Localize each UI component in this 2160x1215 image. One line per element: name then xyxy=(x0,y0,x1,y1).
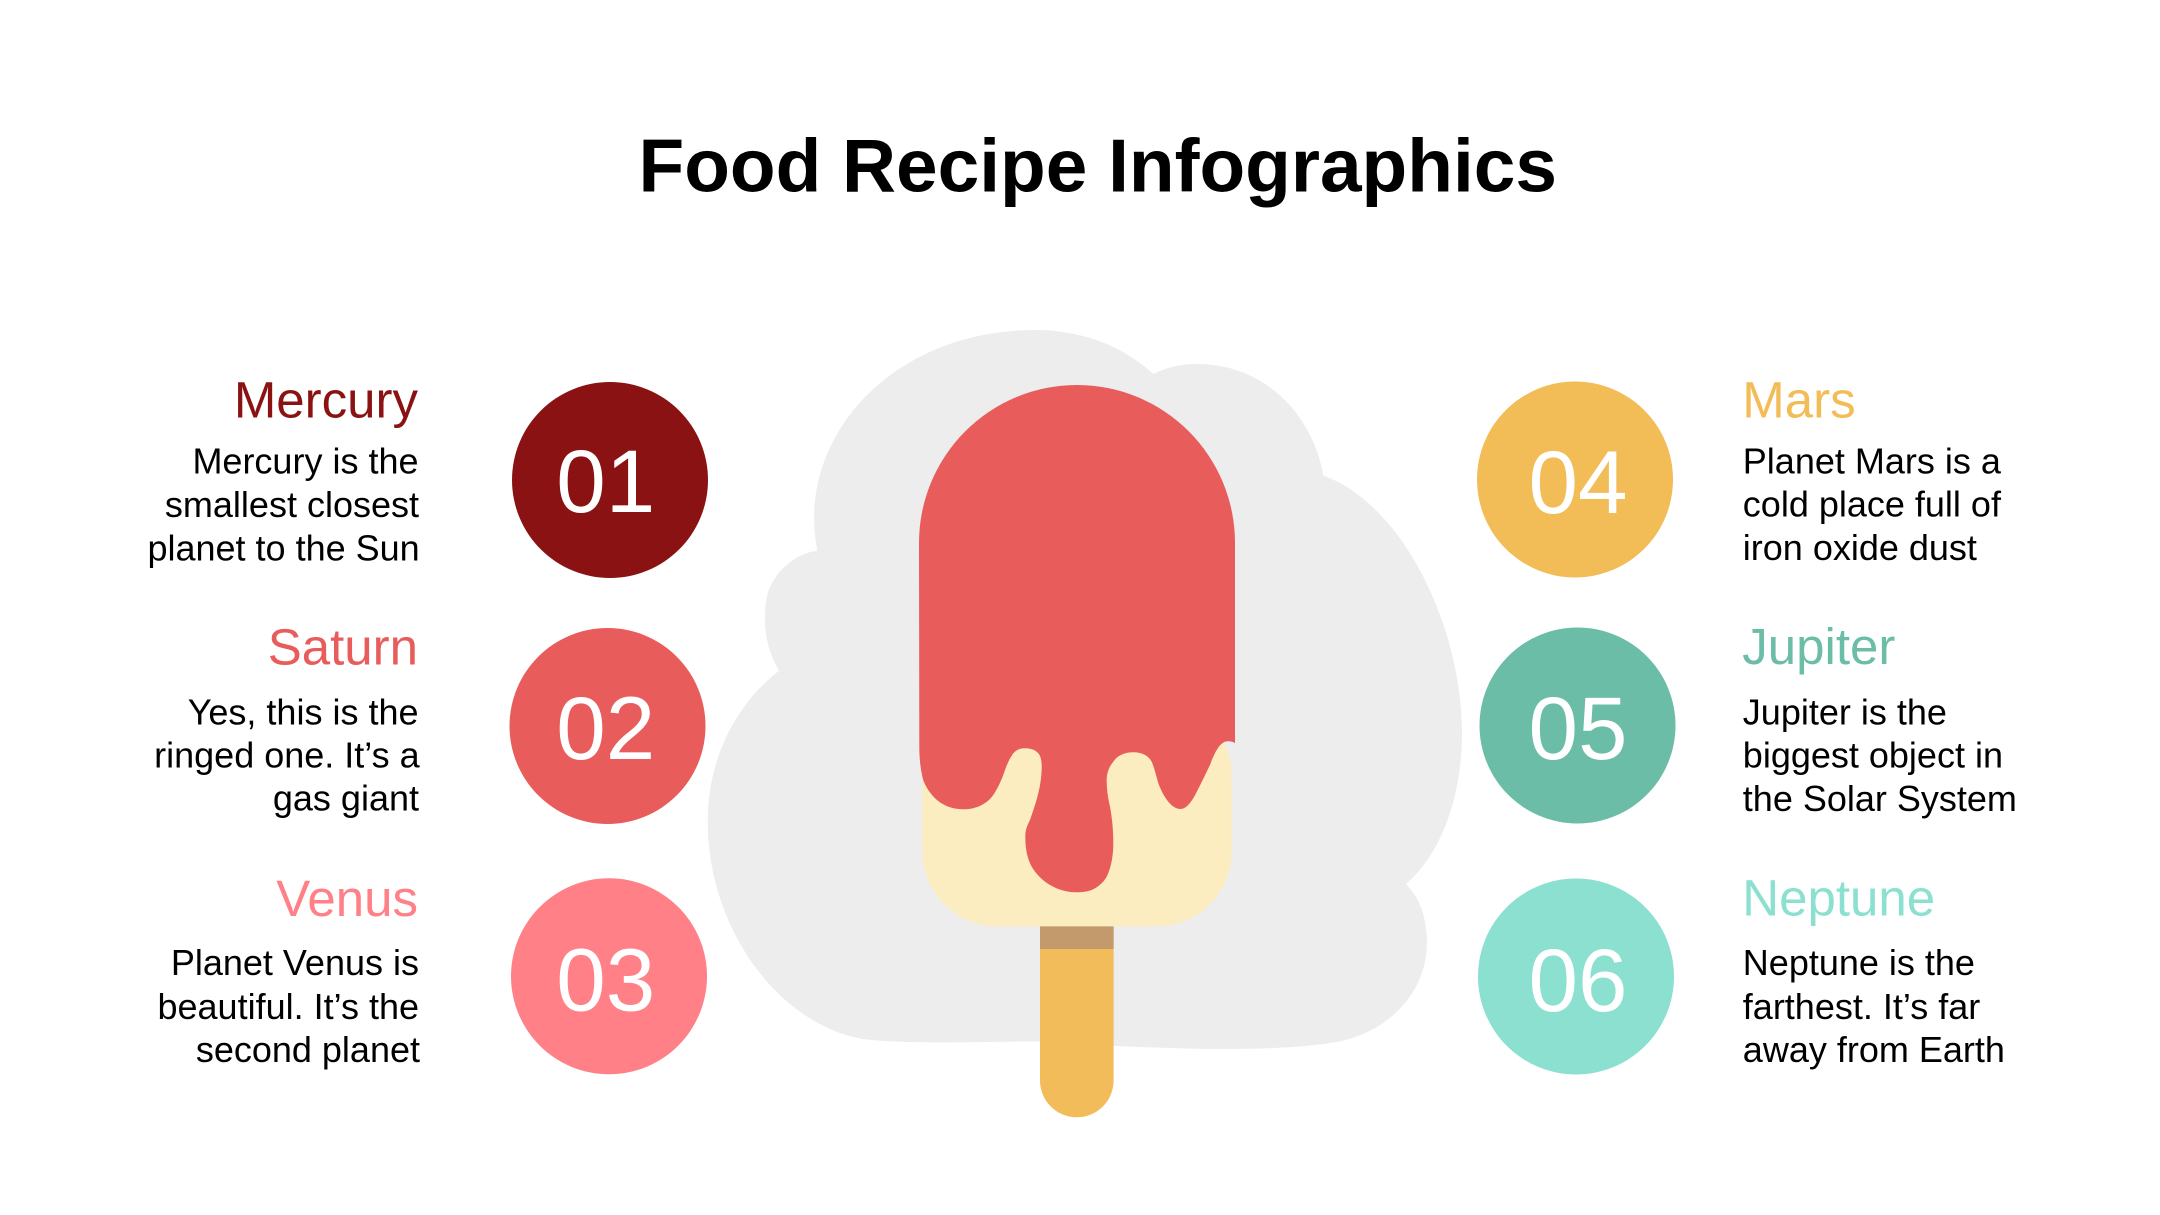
item 04: Mars xyxy=(1477,371,2002,578)
text: Mars description: iron oxide dust xyxy=(1743,527,1977,568)
item 01: Mercury xyxy=(147,372,708,578)
heading: Mercury: Mercury xyxy=(234,372,418,428)
text: Mercury description: planet to the Sun xyxy=(147,528,420,569)
text: Jupiter description: the Solar System xyxy=(1743,778,2017,819)
text: Jupiter description xyxy=(1743,692,2017,819)
red dripping glaze xyxy=(919,385,1235,892)
background cloud blob xyxy=(708,330,1462,1049)
text: Saturn description: ringed one. It’s a xyxy=(154,734,421,775)
text: Saturn description xyxy=(154,691,421,819)
text: Jupiter description: biggest object in xyxy=(1743,735,2003,776)
illustration: popsicle xyxy=(919,385,1235,1117)
text: Neptune description: farthest. It’s far xyxy=(1743,986,1980,1027)
number badge 01 xyxy=(512,382,708,578)
heading: Venus: Venus xyxy=(276,870,418,927)
heading: Neptune: Neptune xyxy=(1742,870,1935,926)
text: Mars description xyxy=(1743,441,2002,568)
text: Mars description: cold place full of xyxy=(1743,484,2002,525)
text: Mars description: Planet Mars is a xyxy=(1743,441,2002,482)
item 05: Jupiter xyxy=(1480,618,2017,824)
text: Venus description: Planet Venus is xyxy=(171,942,419,983)
popsicle stick xyxy=(1040,920,1114,1117)
text: Saturn description: gas giant xyxy=(273,778,419,819)
text: Venus description: beautiful. It’s the xyxy=(157,986,419,1027)
number badge 06 xyxy=(1478,878,1674,1074)
text: Neptune description xyxy=(1743,942,2005,1070)
text: Saturn description: Yes, this is the xyxy=(188,691,418,732)
number badge 04 xyxy=(1477,382,1673,578)
text: Neptune description: away from Earth xyxy=(1743,1029,2005,1070)
text: Neptune description: Neptune is the xyxy=(1743,942,1975,983)
item 02: Saturn xyxy=(154,618,706,824)
heading: Saturn: Saturn xyxy=(268,618,418,675)
title: Food Recipe Infographics xyxy=(638,124,1557,208)
number badge 04: 04 xyxy=(1528,432,1628,532)
number badge 02: 02 xyxy=(556,678,655,778)
text: Mercury description: smallest closest xyxy=(165,484,419,525)
cream base xyxy=(922,700,1232,926)
text: Mercury description xyxy=(147,440,420,569)
text: Venus description: second planet xyxy=(196,1029,420,1070)
number badge 01: 01 xyxy=(556,431,655,531)
text: Venus description xyxy=(157,942,420,1070)
number badge 05 xyxy=(1480,628,1676,824)
number badge 03: 03 xyxy=(556,929,655,1029)
number badge 02 xyxy=(510,628,706,824)
number badge 03 xyxy=(511,878,707,1074)
item 03: Venus xyxy=(157,870,707,1074)
number badge 05: 05 xyxy=(1528,678,1628,778)
heading: Mars: Mars xyxy=(1742,371,1856,428)
heading: Jupiter: Jupiter xyxy=(1742,618,1895,675)
text: Mercury description: Mercury is the xyxy=(192,440,418,481)
stick shadow band xyxy=(1040,926,1114,949)
text: Jupiter description: Jupiter is the xyxy=(1743,692,1947,732)
item 06: Neptune xyxy=(1478,870,2005,1074)
number badge 06: 06 xyxy=(1528,930,1628,1030)
